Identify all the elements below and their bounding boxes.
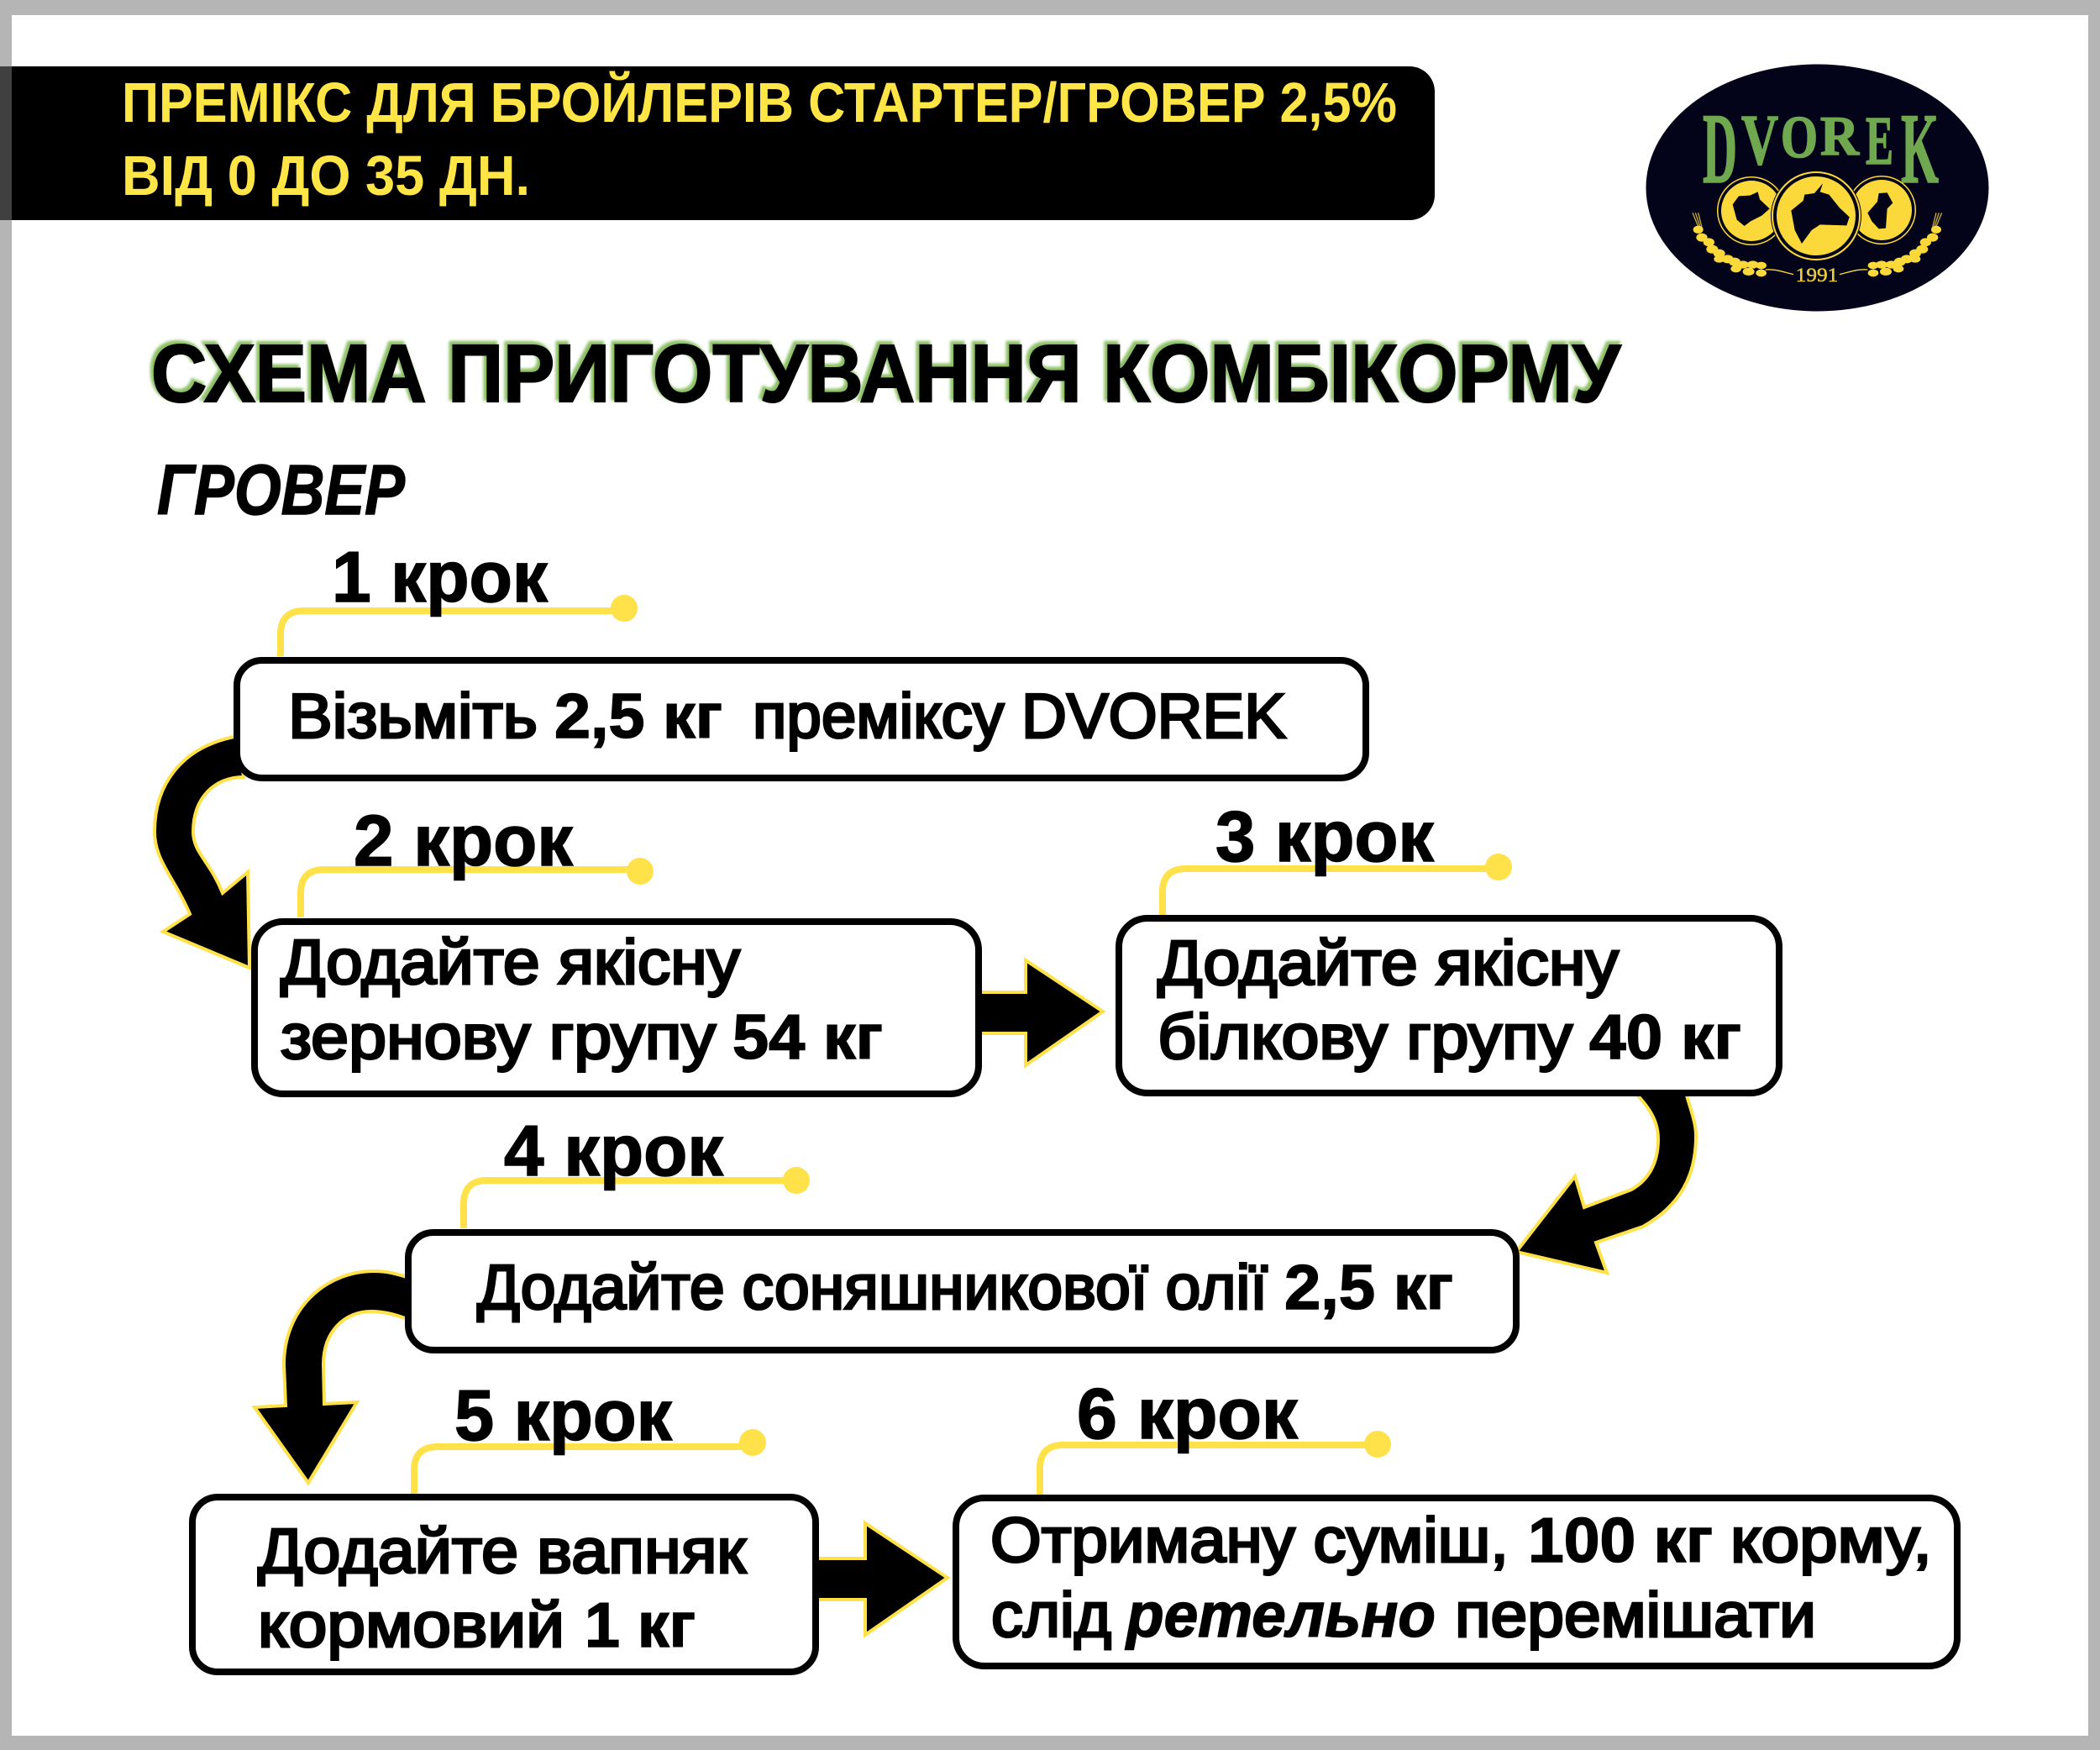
step 6 [956,1374,1957,1666]
step 5 [192,1376,816,1672]
step 3 [1119,797,1779,1093]
step 2 [255,801,979,1094]
step 5 label: 5 крок [454,1376,672,1456]
step 4 label: 4 крок [504,1111,723,1191]
step 2 box: Додайте якісну [281,927,741,997]
step 1 box [237,660,1366,778]
step 2 connector [301,858,654,917]
step 2 label: 2 крок [354,801,573,881]
logo wordmark: R [1820,105,1860,167]
logo: DVOREK [1646,64,1989,311]
step 5 box [192,1497,816,1672]
step 3 box: білкову групу [1158,1001,1573,1072]
step 3 box: Додайте якісну [1158,928,1620,998]
step 1 box: преміксу DVOREK [753,681,1286,751]
step 1 box: Візьміть [288,681,538,751]
step 5 box: кормовий [258,1590,564,1660]
step 6 box: Отриману суміш, [990,1505,1509,1575]
step 5 connector [414,1429,766,1497]
step 4 box: Додайте соняшникової олії [477,1252,1268,1322]
step 1 connector [281,595,638,656]
step 1 box: 2,5 кг [554,681,722,751]
step 6 box: 100 кг [1528,1505,1713,1575]
step 5 box: Додайте вапняк [258,1516,747,1586]
logo wheat and year [1693,213,1942,286]
logo wordmark: D [1703,92,1737,204]
step 4 box: 2,5 кг [1284,1252,1453,1322]
step 5 box: 1 кг [585,1590,696,1660]
step 4 [408,1111,1516,1350]
arrow: step 5 to step 6 [811,1523,948,1635]
logo wordmark: E [1866,102,1893,179]
banner text: ВІД 0 ДО 35 ДН. [122,145,530,208]
step 4 connector [464,1167,810,1228]
step 1 [237,538,1366,778]
step 2 box: 54 кг [732,1001,883,1072]
step 1 label: 1 крок [332,538,548,617]
logo: DVOREK: K [1901,92,1939,204]
subtitle: ГРОВЕР: ГРОВЕР [157,450,406,529]
step 4 box [408,1232,1516,1350]
step 6 label: 6 крок [1077,1374,1298,1454]
logo wordmark: O [1781,105,1818,171]
banner text [122,71,1397,208]
title: СХЕМА ПРИГОТУВАННЯ КОМБІКОРМУ [149,325,1620,417]
banner text: ПРЕМІКС ДЛЯ БРОЙЛЕРІВ СТАРТЕР/ГРОВЕР 2,5% [122,71,1397,134]
logo wheat and year: 1991 [1796,265,1838,286]
step 6 box: слід [991,1579,1111,1650]
logo wordmark: V [1741,99,1778,180]
step 3 label: 3 крок [1215,797,1434,877]
step 6 box: корму, [1730,1505,1932,1575]
arrow: step 2 to step 3 [974,960,1103,1065]
arrow: step 4 to step 5 [255,1271,412,1483]
step 6 connector [1040,1431,1391,1495]
step 6 box: ретельно [1125,1579,1436,1650]
header banner [0,66,1435,220]
title: СХЕМА ПРИГОТУВАННЯ КОМБІКОРМУ [151,328,1622,419]
step 3 box [1119,918,1779,1093]
step 6 box [956,1498,1957,1666]
step 2 box [255,922,979,1094]
arrow: step 3 to step 4 [1516,1092,1696,1273]
logo wordmark [1703,92,1939,204]
step 6 box: перемішати [1455,1579,1816,1650]
step 3 connector [1163,854,1512,915]
logo animal medallions [1717,171,1916,261]
step 3 box: 40 кг [1589,1001,1741,1072]
step 2 box: зернову групу [281,1001,717,1072]
arrow: step 1 to step 2 [155,736,249,968]
